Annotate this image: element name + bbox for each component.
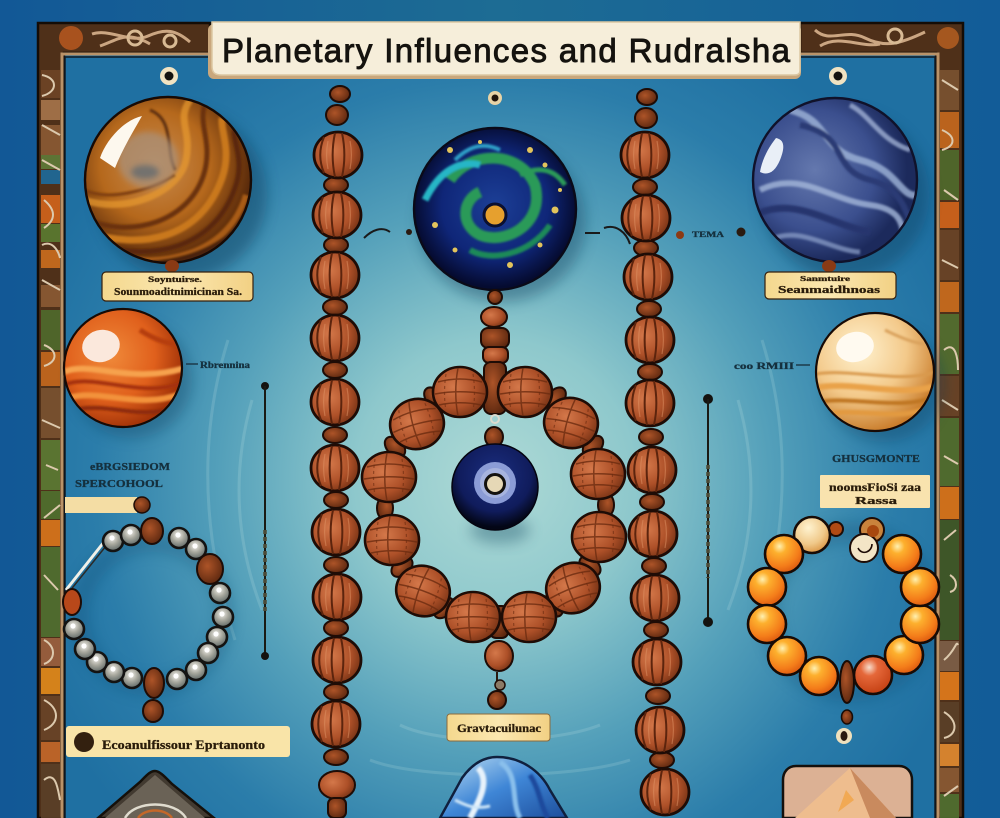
label: blue marble caption (765, 260, 896, 299)
label: left tag with bead (65, 497, 150, 513)
label: blue marble caption: Sanmtuire (800, 275, 850, 283)
annotation: right of centre planet: TEMA (692, 230, 724, 239)
bracelet: orange beads (748, 517, 939, 744)
title banner (208, 22, 801, 79)
bracelet: silver pearl (63, 518, 233, 722)
title text: Planetary Influences and Rudralsha (222, 32, 791, 69)
label: lower left caption: Ecoanulfissour Eprtanonto (102, 737, 265, 752)
annotation: right of centre planet (585, 227, 746, 244)
label: brown agate caption: Soyntuirse. (148, 275, 202, 284)
label: lower left caption (66, 726, 290, 757)
vertical line: left (261, 382, 269, 660)
label: right tag (820, 475, 930, 508)
caption: orange planet annotation (186, 360, 251, 370)
caption: cream planet annotation (734, 361, 810, 371)
text: left side caption: eBRGSIEDOM (90, 461, 171, 473)
conch clasp (850, 518, 884, 562)
pendant: evil eye (452, 415, 538, 544)
bracelet shadows (80, 532, 930, 692)
frame top left (38, 23, 210, 818)
rudraksha ring: centre mala (362, 362, 626, 642)
text: right side caption: GHUSGMONTE (832, 453, 920, 465)
gemstone: dark pyramid (98, 771, 214, 818)
icon: hanging ring centre (488, 91, 502, 105)
gemstone: peach pyramid tile (783, 766, 912, 818)
text: left side caption: SPERCOHOOL (75, 478, 163, 490)
planet: cream striped (816, 313, 944, 442)
frame top right (800, 23, 963, 818)
label: centre mala caption: Gravtacuilunac (457, 721, 542, 735)
planet: blue marble (753, 98, 929, 279)
frame right strip colours (940, 70, 959, 818)
label: right tag: Rassa (855, 496, 897, 507)
vertical line: right (703, 394, 713, 627)
label: right tag: noomsFioSi zaa (829, 480, 921, 494)
planet: brown agate (84, 97, 267, 280)
text: left side caption (75, 461, 171, 490)
caption: cream planet annotation: coo RMIII (734, 361, 795, 371)
caption: orange planet annotation: Rbrennina (200, 360, 251, 370)
planet: orange striped (64, 309, 192, 438)
label: brown agate caption (102, 260, 253, 301)
rudraksha string: right (621, 89, 689, 815)
planet: central blue swirl (414, 128, 586, 302)
icon: hanging ring right (829, 67, 847, 85)
label: blue marble caption: Seanmaidhnoas (778, 284, 881, 296)
gemstone: blue stone (440, 757, 567, 818)
annotation: left of centre planet (364, 229, 412, 238)
pendant: lower beads (485, 641, 513, 709)
label: brown agate caption: Sounmoaditnimicinan Sa. (114, 286, 242, 298)
label: centre mala caption (447, 714, 550, 741)
icon: hanging ring left (160, 67, 178, 85)
stem beads: centre (481, 290, 509, 363)
frame left strip colours (41, 70, 60, 818)
panel glow arcs (208, 340, 782, 775)
rudraksha string: left (311, 86, 362, 818)
